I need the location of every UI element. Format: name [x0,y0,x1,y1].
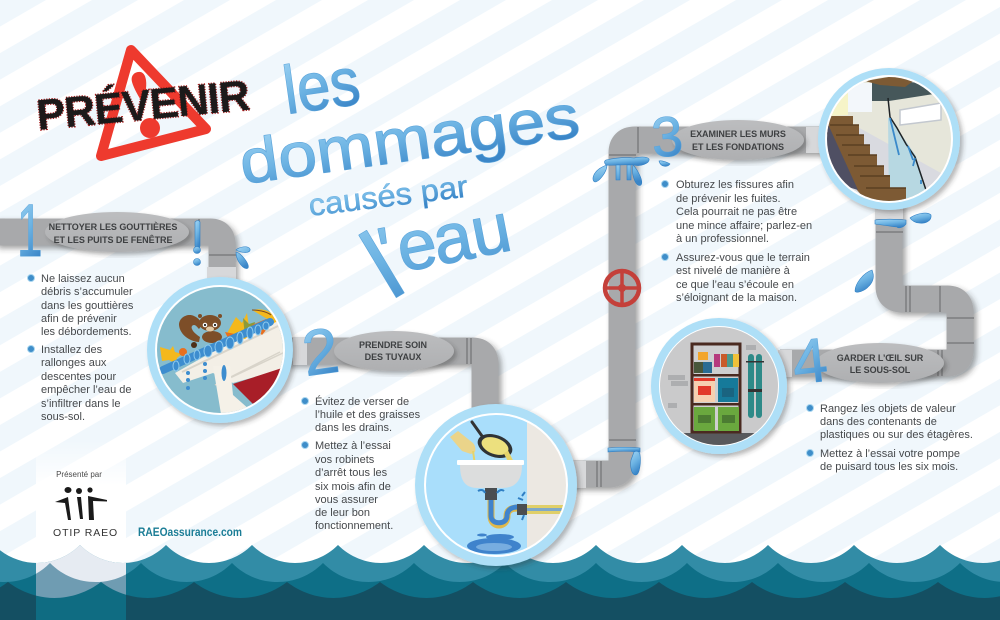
title line: l'eau: eau [390,188,517,287]
step 1 text: descentes pour [41,371,117,383]
heading: prévenir: PRÉVENIR [34,72,252,140]
bullet [28,274,34,282]
step 1 label: ET LES PUITS DE FENÊTRE [54,234,172,245]
presented by: Présenté par [56,470,102,479]
illustration: sink [415,404,577,566]
step 4 text: dans des contenants de [820,416,937,428]
step 1 text [28,273,134,423]
step 4 text: de puisard tous les six mois. [820,461,958,473]
step 1 label: NETTOYER LES GOUTTIÈRES [49,222,177,232]
drop by elbow of pipe 4 [855,270,873,292]
drain [485,488,497,500]
title line: causés par: causés par [307,169,470,223]
wall bricks [668,345,756,408]
window [900,103,941,125]
water along gutter [163,322,270,390]
logo wordmark: OTIP RAEO [53,527,118,539]
step 3 text: ce que l’eau s’écoule en [676,279,794,291]
p-trap [491,500,518,525]
step 2 label [334,331,454,371]
stairs [825,116,906,205]
bullet [806,450,814,456]
pipe 3 [570,140,825,474]
water ring under circle 3 [875,213,931,228]
illustration: gutter [147,277,293,423]
valve wheel [605,271,639,305]
step 4 text [806,403,973,473]
crack [888,98,926,190]
pipe 1 [0,232,222,282]
step 2 text: fonctionnement. [315,520,393,532]
step 2 text [302,395,421,532]
bullet [662,180,668,188]
exclamation mark [132,72,160,138]
step 3 text: Assurez-vous que le terrain [676,252,810,264]
water ring on pipe 3 [608,447,640,475]
title: water lettering [235,43,584,320]
pipe network [0,140,960,474]
pipe 2 [285,351,485,432]
website: RAEOassurance.com [138,527,242,539]
step 1 text: sous-sol. [41,411,85,423]
water numbers [17,104,831,398]
step 3 label: ET LES FONDATIONS [692,142,784,152]
number 4: 4 [789,326,831,398]
bullet [662,254,668,260]
title line: l'eau: ' [372,213,399,292]
gutter body [175,318,290,383]
pipe joints [199,127,974,488]
step 2 text: Mettez à l’essai [315,440,391,452]
step 1 text: afin de prévenir [41,313,117,325]
number 3: 3 [649,104,685,169]
step 2 text: d’arrêt tous les [315,467,388,479]
pipe 4 [780,200,960,363]
falling drops [186,371,190,375]
waves [0,545,1000,620]
step 2 text: Évitez de verser de [315,395,409,408]
step 2 text: dans les drains. [315,422,392,434]
title line: dommages: dommages [235,82,584,198]
step 2 text: six mois afin de [315,481,391,493]
step 3 text: une mince affaire; parlez-en [676,220,812,232]
step 3 label [672,120,804,160]
skis [748,354,754,418]
step 1 text: dans les gouttières [41,300,134,312]
step 4 text: plastiques ou sur des étagères. [820,429,973,441]
step 1 label [45,212,189,252]
illustration: basement shelf [651,318,787,454]
step 2 text: l’huile et des graisses [315,409,421,421]
step 4 text: Rangez les objets de valeur [820,403,956,415]
wall pipe [527,505,565,514]
step 3 text [662,179,812,304]
step 1 text: Ne laissez aucun [41,273,125,285]
title line: les: les [279,43,364,129]
squirrel [179,314,222,348]
number 1: 1 [17,190,43,273]
shelf frame [692,344,740,432]
step 1 text: les débordements. [41,326,132,338]
water drips on wall [890,118,921,184]
bullet [302,442,308,448]
step 4 label: LE SOUS-SOL [850,365,911,375]
step 3 text: est nivelé de manière à [676,265,791,277]
step 1 text: débris s’accumuler [41,286,133,298]
step 3 text: s’éloignant de la maison. [676,292,797,304]
connector sleeves [207,127,903,488]
step 3 text: à un professionnel. [676,233,769,245]
step 1 text: Installez des [41,344,103,356]
step 1 text: empêcher l’eau de [41,384,132,396]
white panel [848,83,872,112]
dark ceiling [872,82,932,101]
logo panel over the waves [36,545,126,620]
title line: l'eau: l [344,212,421,320]
step 4 label [816,343,944,383]
number 2: 2 [298,314,343,390]
step 2 text: vous assurer [315,494,378,506]
warning triangle [101,50,206,156]
frying pan [472,422,482,436]
step 2 text: vos robinets [315,454,375,466]
shelf items [698,352,708,360]
step 1 text: s’infiltrer dans le [41,398,120,410]
puddle [467,538,521,554]
sink basin [460,465,522,488]
downspout [214,374,246,413]
step 4 label: GARDER L’ŒIL SUR [837,353,924,363]
drips on pipe 1 [194,220,250,269]
step 1 text: rallonges aux [41,357,107,369]
bullet [302,398,308,404]
logo: three figures [55,487,107,520]
step 3 label: EXAMINER LES MURS [690,129,786,139]
drips at top of pipe 3 [593,157,670,185]
water on wall [888,117,927,205]
bottle [450,431,475,454]
step 3 text: Cela pourrait ne pas être [676,206,797,218]
step 2 text: de leur bon [315,507,370,519]
bullet [28,346,34,352]
step 2 label: DES TUYAUX [365,352,421,362]
fallen leaves [160,309,276,362]
step 3 text: Obturez les fissures afin [676,179,794,191]
water drips on pipes [194,157,931,475]
illustration: cracked wall [818,68,960,210]
step 3 text: de prévenir les fuites. [676,193,781,205]
red wall [233,368,282,404]
step 4 text: Mettez à l’essai votre pompe [820,448,960,460]
step 2 label: PRENDRE SOIN [359,340,427,350]
bullet [806,404,814,412]
